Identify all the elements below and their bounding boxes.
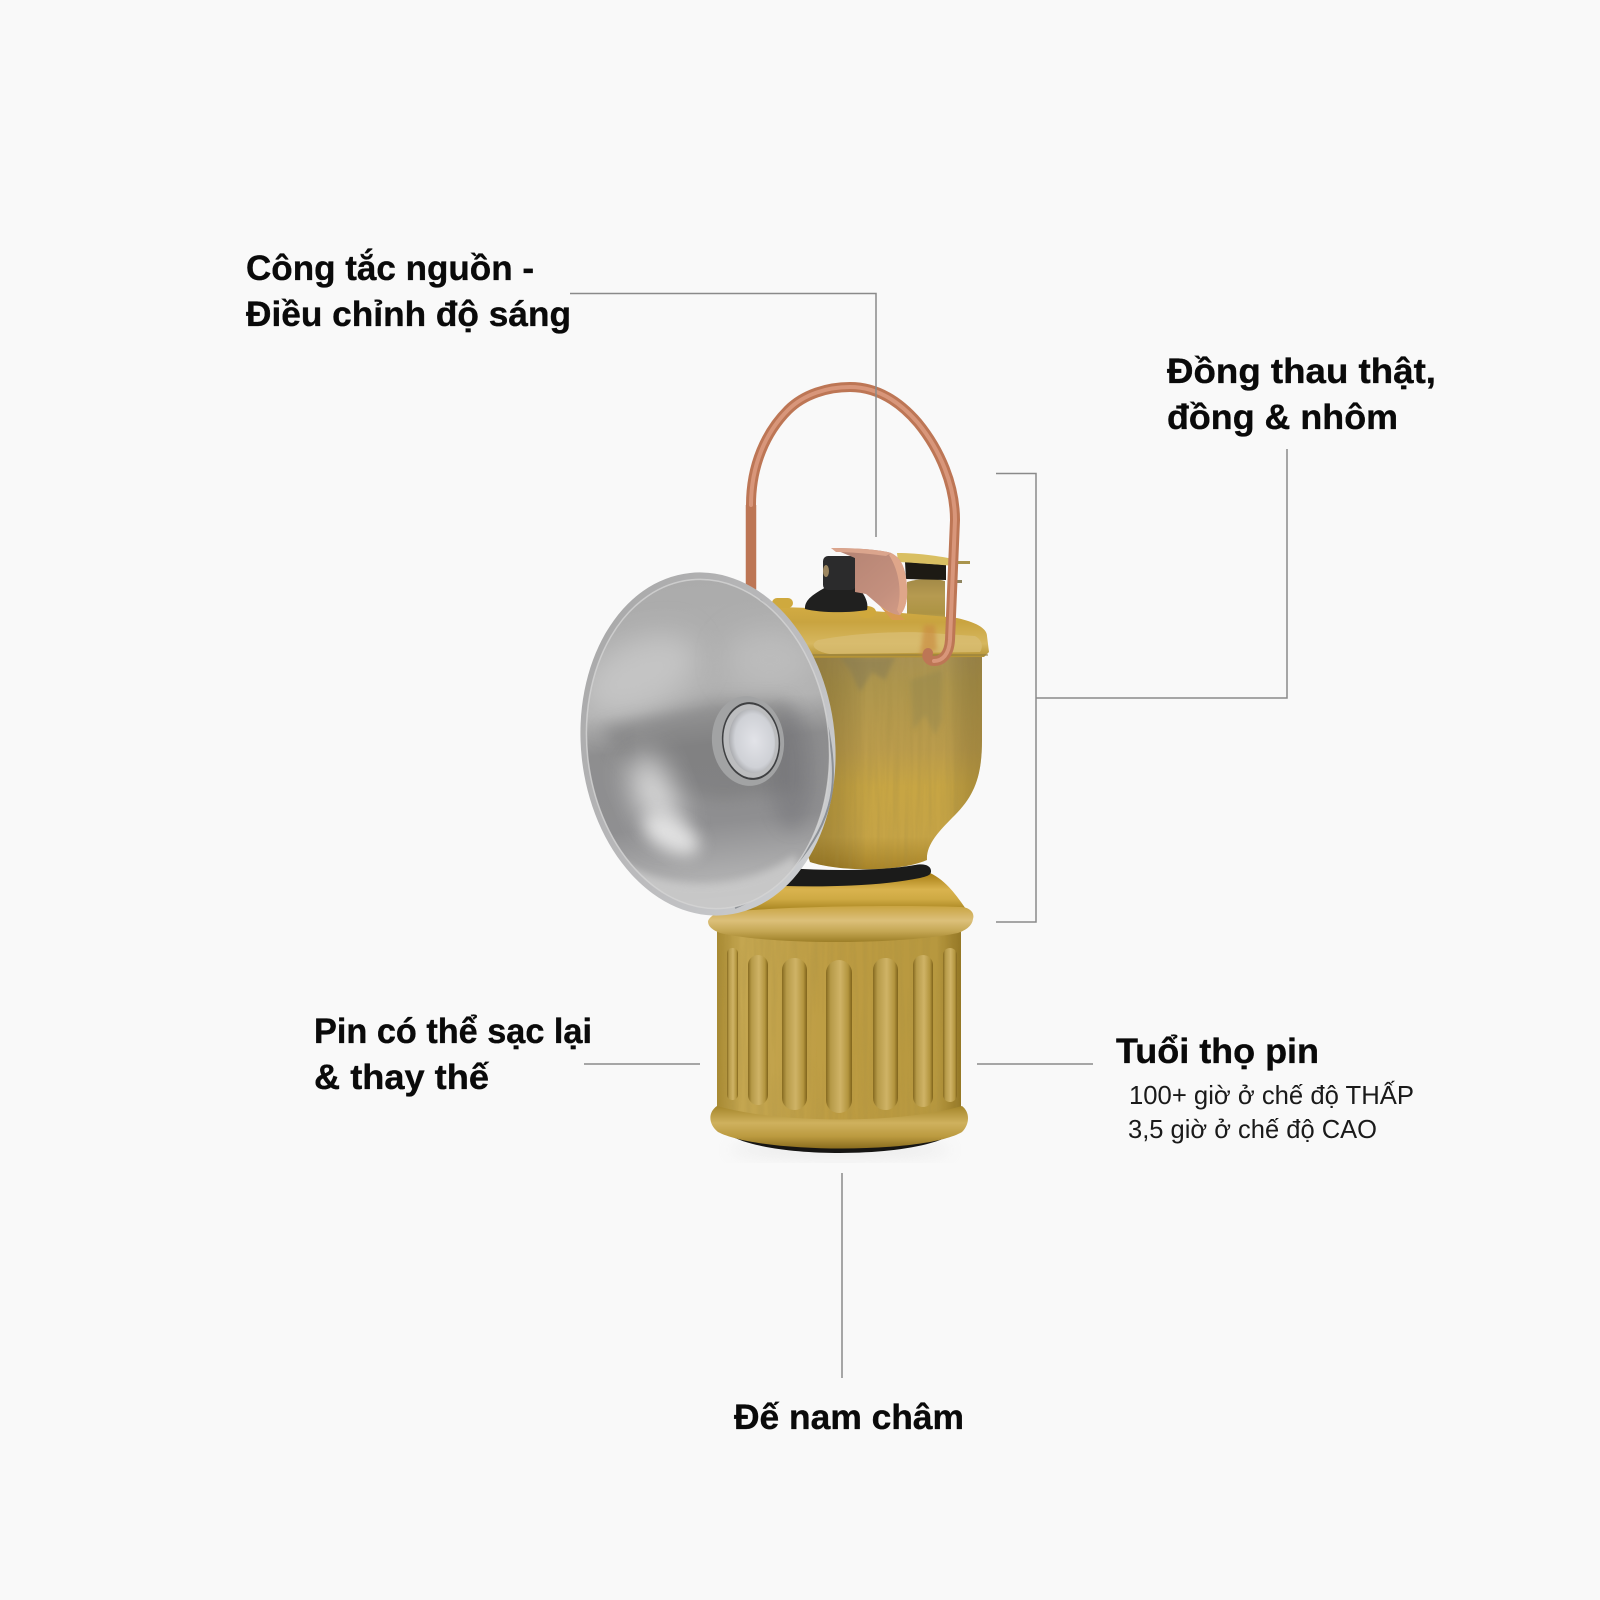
reflector rim [564, 560, 852, 928]
label: power switch: Điều chỉnh độ sáng [246, 295, 571, 334]
label: power switch: Công tắc nguồn - [246, 248, 534, 288]
label: materials: đồng & nhôm [1167, 398, 1398, 437]
cylinder brushed texture [717, 930, 961, 1130]
flange [708, 906, 973, 942]
label: battery life [1116, 1032, 1414, 1144]
patina streaks [840, 657, 942, 735]
top plate lower edge [790, 654, 988, 656]
rear brass fitting [897, 553, 970, 622]
label: rechargeable battery: & thay thế [314, 1058, 490, 1097]
copper handle [751, 387, 955, 661]
label: battery life: 3,5 giờ ở chế độ CAO [1128, 1114, 1377, 1144]
label: rechargeable battery: Pin có thể sạc lại [314, 1012, 592, 1051]
callout line: magnetic base [841, 1173, 843, 1378]
label: battery life: Tuổi thọ pin [1116, 1032, 1319, 1071]
copper power lever [831, 548, 907, 620]
top plate inset [814, 632, 982, 654]
lens glass [726, 707, 778, 775]
callout line: battery life [977, 1063, 1093, 1065]
lens ring [707, 692, 789, 790]
label: materials: Đồng thau thật, [1167, 352, 1436, 391]
callout bracket: materials [996, 449, 1287, 922]
reflector shading [590, 632, 814, 906]
reflector inner lip [570, 567, 846, 921]
callout line: power switch [570, 294, 876, 537]
handle left leg behind the lens [746, 505, 756, 600]
lamp product illustration [564, 387, 989, 1157]
bottom ring [710, 1106, 968, 1148]
black rubber knob [805, 556, 867, 612]
black o-ring [785, 864, 931, 886]
reflector bowl [570, 567, 846, 921]
brass bumps on plate [772, 598, 876, 618]
upper brass body [790, 652, 982, 869]
label: power switch [246, 248, 571, 334]
label: rechargeable battery [314, 1012, 592, 1097]
body brushed texture [896, 778, 948, 809]
brass top plate [775, 607, 989, 658]
body side shading [790, 652, 982, 869]
silver reflector dish [580, 572, 836, 916]
label: materials [1167, 352, 1436, 437]
callout line: battery [584, 1063, 700, 1065]
solder stain [920, 625, 937, 656]
floor shadow [728, 1143, 952, 1157]
fluted cylinder [717, 925, 961, 1128]
reflector right edge [735, 600, 833, 908]
black base [735, 1138, 945, 1153]
lower dome [712, 873, 968, 920]
label: magnetic base: Đế nam châm [734, 1398, 964, 1437]
flutes [727, 948, 957, 1113]
label: battery life: 100+ giờ ở chế độ THẤP [1129, 1080, 1414, 1110]
